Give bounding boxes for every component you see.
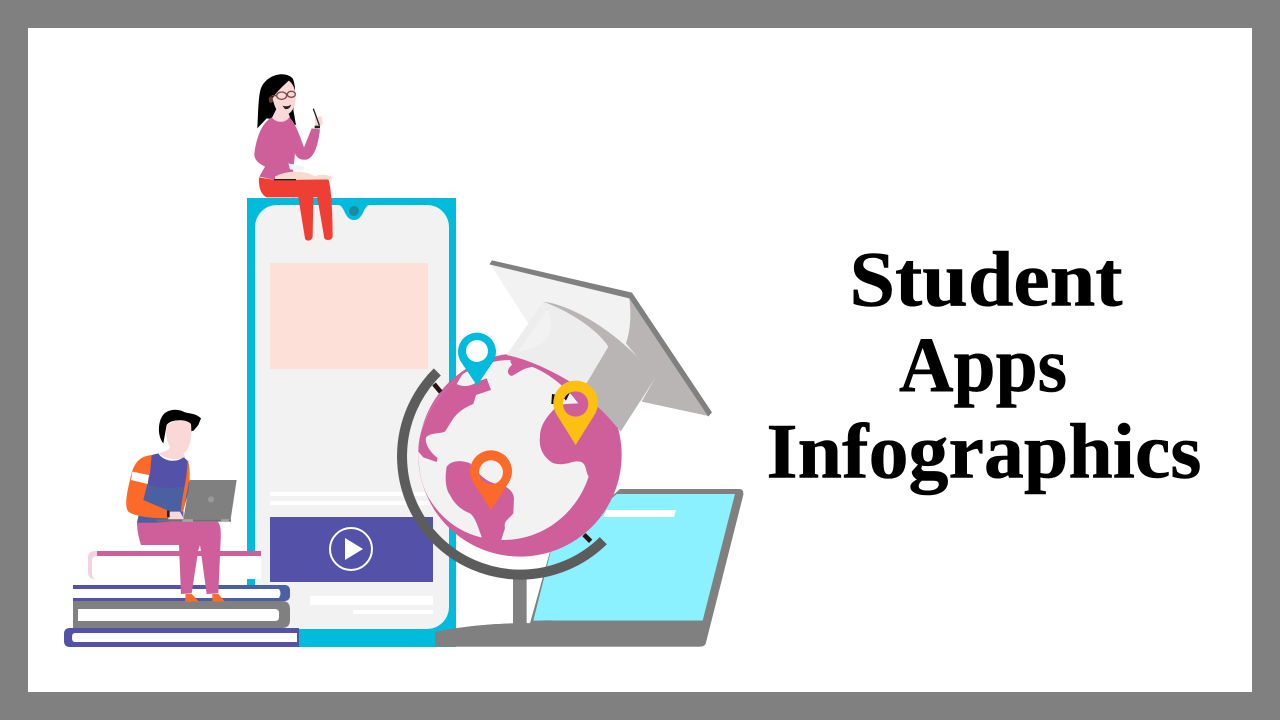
title	[766, 236, 1202, 494]
hair	[257, 74, 296, 128]
shoes	[185, 594, 225, 602]
ear	[269, 96, 273, 103]
illustration: globe	[418, 353, 622, 557]
far arm	[181, 460, 190, 512]
icon: orange pin	[470, 450, 512, 510]
screen highlight	[603, 510, 676, 517]
icon: cyan pin	[458, 333, 496, 386]
bottom book	[64, 628, 299, 647]
laptop base	[435, 620, 706, 647]
illustration: stacked books	[64, 551, 299, 647]
illustration: graduation cap body	[507, 302, 655, 432]
meridian arc	[402, 372, 603, 575]
laptop base	[157, 519, 231, 522]
stand pole	[513, 577, 527, 626]
cap body highlight	[518, 310, 551, 351]
title line 2: Apps	[899, 321, 1067, 408]
illustration: phone	[247, 198, 456, 647]
board light face	[490, 264, 708, 416]
neck and face	[159, 420, 191, 459]
red trousers	[259, 177, 333, 241]
laptop frame	[435, 489, 743, 647]
hand	[315, 116, 323, 128]
black mark behind pin	[551, 393, 570, 404]
phone notch	[338, 205, 370, 220]
illustration: graduation cap board	[489, 260, 712, 417]
top book	[88, 551, 261, 579]
hair	[159, 410, 201, 443]
continent: top island	[508, 358, 540, 376]
sleeve	[126, 455, 168, 518]
open book	[275, 172, 333, 179]
illustration: woman with book	[254, 74, 333, 241]
globe light ocean	[418, 360, 589, 540]
continent: south	[446, 461, 514, 541]
continent: north west	[418, 374, 491, 462]
torso	[137, 453, 190, 523]
book cover	[274, 179, 296, 180]
watch	[167, 511, 170, 517]
board edge	[489, 260, 712, 417]
text lines below video	[310, 596, 433, 614]
title line 3: Infographics	[766, 408, 1202, 494]
icon: yellow pin	[553, 381, 598, 445]
pen	[313, 109, 319, 125]
sleeve band	[131, 472, 149, 484]
laptop logo	[208, 496, 214, 502]
grey book	[73, 601, 290, 628]
text lines above video	[270, 492, 430, 505]
neck	[272, 108, 290, 122]
title line 1: Student	[850, 236, 1123, 322]
icon: play button	[330, 528, 372, 570]
phone body	[247, 198, 456, 647]
laptop screen	[533, 494, 735, 621]
phone screen	[255, 205, 449, 629]
cap body light side	[507, 302, 608, 383]
face	[273, 81, 296, 115]
illustration: laptop	[435, 489, 743, 647]
hand	[168, 512, 184, 519]
icon: location pins	[458, 333, 598, 510]
blue book	[73, 585, 290, 601]
torso shade	[137, 483, 190, 523]
glasses	[272, 91, 295, 99]
peach content block	[270, 263, 428, 369]
globe sphere	[418, 353, 622, 557]
pants	[137, 522, 221, 594]
cap body shaded side	[543, 302, 655, 432]
laptop	[183, 480, 237, 519]
axis pins	[434, 384, 591, 541]
illustration: globe stand	[402, 372, 603, 626]
illustration: man with laptop	[126, 410, 237, 602]
cuff	[315, 126, 320, 128]
video block	[270, 517, 433, 582]
sleeve page	[288, 163, 304, 171]
mouth	[282, 105, 291, 109]
board shaded face	[626, 298, 708, 416]
sweater	[254, 117, 320, 180]
phone camera	[349, 206, 359, 216]
